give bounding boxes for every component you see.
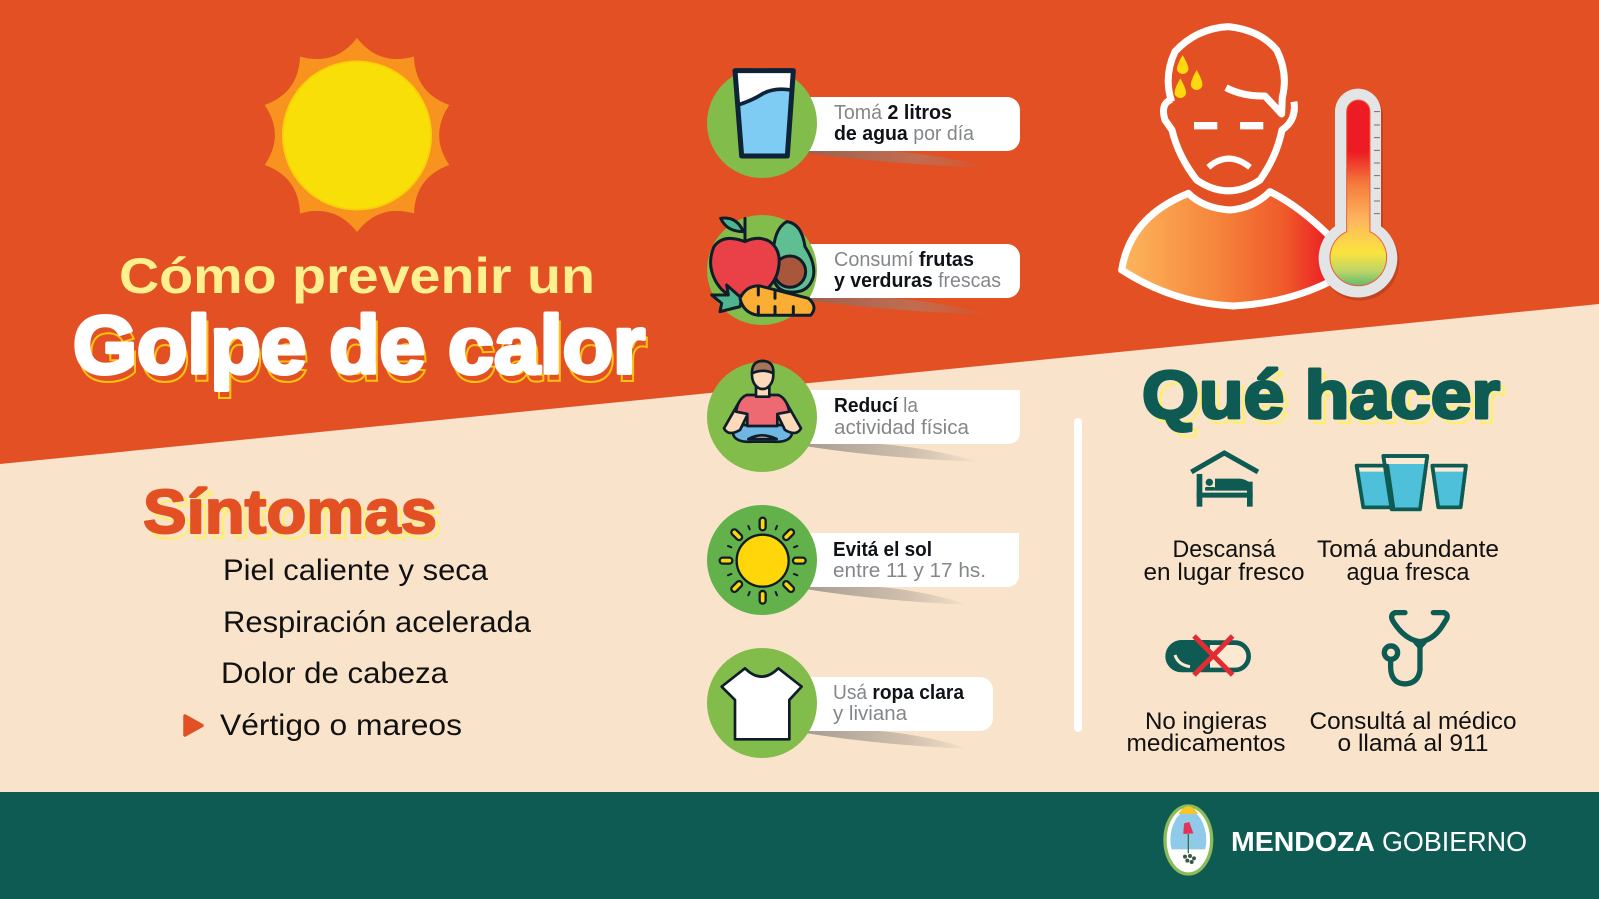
icon: glass of water [735, 71, 793, 156]
icon: sun [720, 518, 806, 604]
background: cream diagonal area [0, 304, 1599, 792]
label shadow [805, 298, 992, 315]
thermometer [1319, 89, 1399, 301]
label pill [790, 677, 993, 731]
green circle [707, 505, 817, 615]
caption: Tomá abundante [1317, 536, 1499, 563]
label pill [790, 97, 1020, 151]
heading: qué hacer: Qué hacer [1142, 357, 1500, 433]
icon: person meditating [724, 361, 801, 442]
tip 2: fruit: y verduras frescas [834, 270, 1001, 292]
green circle [707, 68, 817, 178]
green circle [707, 362, 817, 472]
heading shadow: Síntomas [148, 483, 442, 552]
logo: Mendoza coat of arms [1165, 806, 1212, 874]
tip 4: sun [707, 505, 1019, 615]
icon: t-shirt [722, 668, 802, 739]
panel: síntomas [143, 478, 531, 742]
label shadow [805, 444, 980, 462]
eyes [1194, 115, 1263, 137]
label pill [790, 244, 1020, 298]
caption: Descansá [1172, 536, 1276, 563]
green circle [707, 648, 817, 758]
symptom 2: Respiración acelerada [223, 606, 531, 639]
label shadow [805, 151, 992, 168]
icon: three glasses [1357, 456, 1466, 509]
label text: Consumí frutas [834, 249, 974, 271]
icon: stethoscope [1384, 613, 1447, 684]
icon: bed under roof [1191, 453, 1258, 507]
title line 1: Cómo prevenir un [119, 248, 595, 304]
arrow bullet [185, 716, 202, 735]
panel: qué hacer: medicamentos [1126, 730, 1286, 757]
logo text: MENDOZA [1231, 826, 1375, 857]
panel: qué hacer: agua fresca [1346, 559, 1470, 586]
symptom 4: Vértigo o mareos [220, 709, 462, 742]
icon: crossed-out pill [1166, 636, 1249, 675]
label text: Reducí la [834, 395, 919, 417]
tip 5: clothes [707, 648, 993, 758]
tip 1: water: de agua por día [834, 123, 975, 145]
label pill [790, 390, 1020, 444]
logo text light: GOBIERNO [1382, 826, 1527, 857]
title line 2 shadow: Golpe de calor [76, 308, 648, 399]
title line 2: Golpe de calor [73, 300, 645, 391]
footer band [0, 792, 1599, 899]
caption: Consultá al médico [1310, 708, 1516, 735]
tip 2: fruit [707, 215, 1020, 325]
tip 1: water [707, 68, 1020, 178]
label shadow [805, 587, 970, 605]
title [73, 248, 648, 399]
icon: fruit and vegetables [711, 218, 814, 315]
caption: No ingieras [1145, 708, 1267, 735]
illustration: sick person with thermometer [1122, 27, 1399, 306]
panel: qué hacer: o llamá al 911 [1338, 730, 1488, 757]
person body [1122, 192, 1330, 306]
divider [1074, 418, 1082, 732]
label text: Tomá 2 litros [834, 102, 952, 124]
icon: sun [265, 38, 449, 232]
label text: Usá ropa clara [833, 682, 965, 704]
label text: Evitá el sol [833, 539, 932, 561]
panel: prevention tips [707, 68, 1020, 758]
tip 3: activity: actividad física [834, 417, 970, 439]
tip 3: activity [707, 361, 1020, 472]
heading: síntomas: Síntomas [143, 478, 437, 547]
person head [1163, 27, 1294, 191]
label pill [790, 533, 1019, 587]
tip 4: sun: entre 11 y 17 hs. [833, 560, 986, 582]
symptom 1: Piel caliente y seca [223, 554, 488, 587]
green circle [707, 215, 817, 325]
tip 5: clothes: y liviana [833, 703, 908, 725]
panel: qué hacer [1126, 357, 1516, 757]
symptom 3: Dolor de cabeza [221, 657, 448, 690]
heading shadow: Qué hacer [1147, 362, 1505, 438]
panel: qué hacer: en lugar fresco [1144, 559, 1304, 586]
sweat drops [1175, 55, 1202, 98]
label shadow [805, 731, 970, 749]
mouth [1208, 159, 1250, 167]
